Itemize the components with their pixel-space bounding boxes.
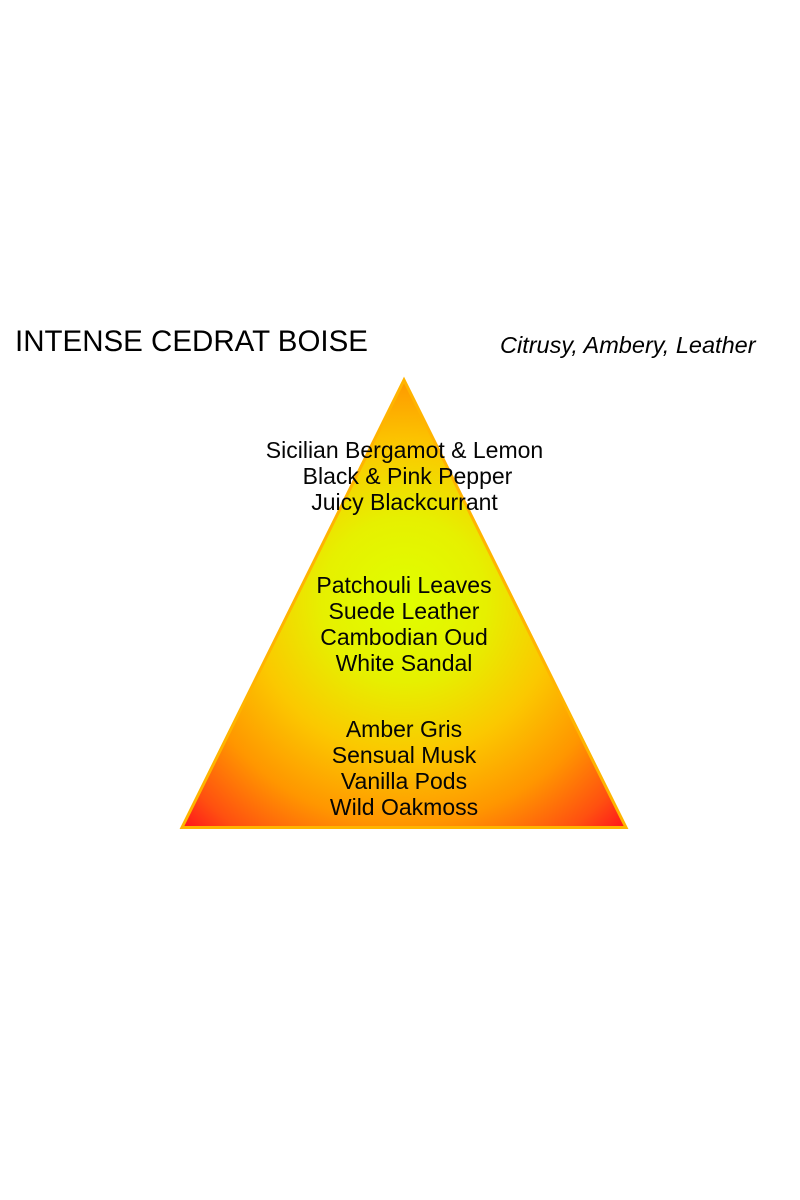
base notes: Sensual Musk <box>332 742 477 768</box>
title: INTENSE CEDRAT BOISE <box>15 325 368 358</box>
base notes: Amber Gris <box>346 716 462 742</box>
base notes: Vanilla Pods <box>341 768 467 794</box>
heart notes: Patchouli Leaves <box>316 572 492 598</box>
heart notes: Cambodian Oud <box>320 624 488 650</box>
subtitle: scent family: Citrusy, Ambery, Leather <box>500 332 757 358</box>
top notes <box>266 437 543 515</box>
base notes <box>330 716 478 820</box>
pyramid <box>182 380 626 828</box>
heart notes <box>316 572 492 676</box>
heart notes: White Sandal <box>336 650 472 676</box>
heart notes: Suede Leather <box>329 598 480 624</box>
top notes: Juicy Blackcurrant <box>311 489 498 515</box>
top notes: Black & Pink Pepper <box>303 463 513 489</box>
base notes: Wild Oakmoss <box>330 794 478 820</box>
top notes: Sicilian Bergamot & Lemon <box>266 437 543 463</box>
